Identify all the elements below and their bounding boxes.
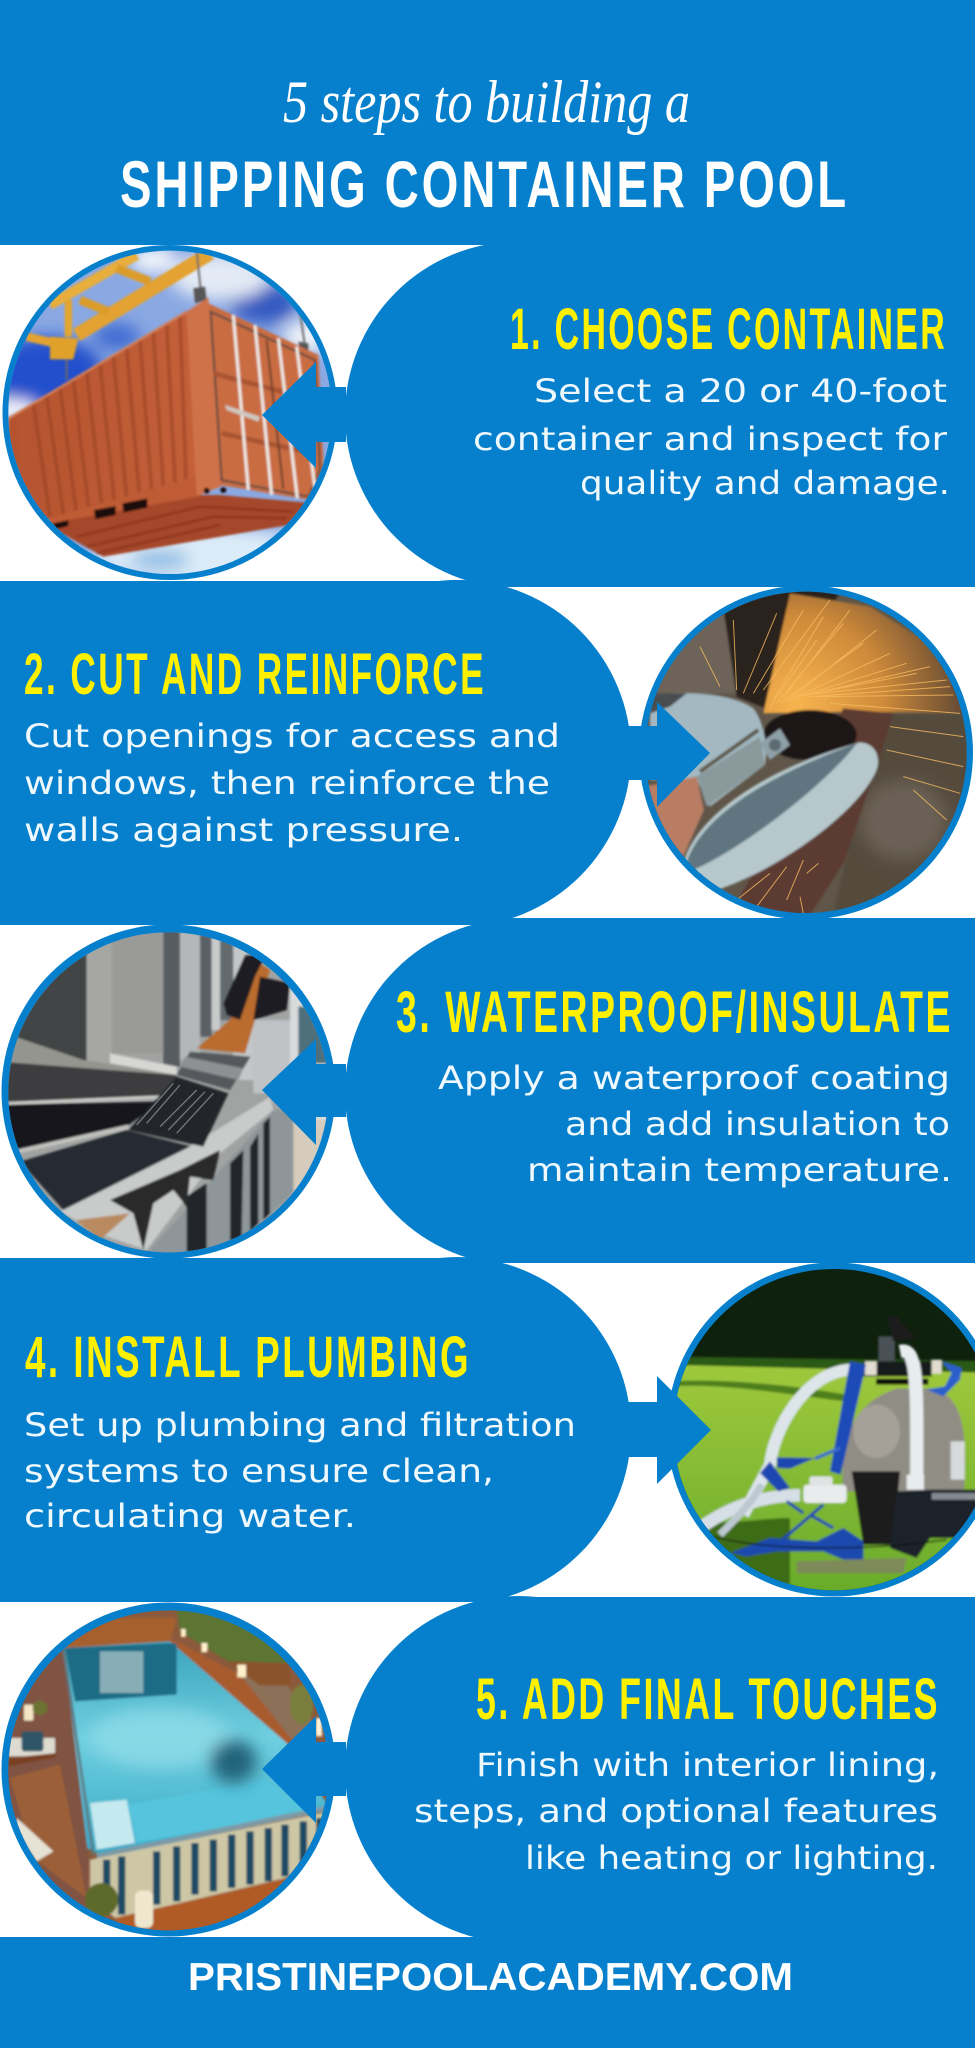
panel: step 3 background bbox=[0, 918, 692, 1266]
description: step 1: quality and damage. bbox=[580, 464, 950, 502]
title block bbox=[120, 69, 849, 221]
text block: step 3 bbox=[396, 980, 953, 1189]
arrow: step 5 bbox=[262, 1716, 346, 1823]
description: step 5: steps, and optional features bbox=[414, 1792, 938, 1830]
description: step 4 bbox=[24, 1406, 576, 1535]
heading: step 4: 4. INSTALL PLUMBING bbox=[25, 1325, 471, 1390]
description: step 2: Cut openings for access and bbox=[24, 717, 560, 755]
panel: step 2 background bbox=[284, 580, 975, 927]
description: step 2 bbox=[24, 717, 560, 849]
description: step 4: Set up plumbing and filtration bbox=[24, 1406, 576, 1444]
description: step 1: container and inspect for bbox=[473, 420, 948, 458]
photo: finished container pool at dusk bbox=[0, 1598, 345, 1943]
heading: step 2: 2. CUT AND REINFORCE bbox=[24, 642, 486, 707]
text block: step 2 bbox=[24, 642, 560, 849]
arrow: step 3 bbox=[262, 1039, 346, 1145]
description: step 3 bbox=[438, 1059, 952, 1189]
description: step 2: windows, then reinforce the bbox=[24, 764, 550, 802]
description: step 5: like heating or lighting. bbox=[525, 1839, 938, 1877]
text block: step 4 bbox=[24, 1325, 576, 1535]
panel: step 5 background bbox=[0, 1596, 692, 1943]
photo: brush applying waterproof coating bbox=[0, 920, 345, 1265]
description: step 5 bbox=[414, 1746, 939, 1877]
photo: sand filter and pool pump on a lawn bbox=[672, 1263, 975, 1596]
text block: step 5 bbox=[414, 1667, 940, 1877]
arrow: step 4 bbox=[628, 1376, 711, 1484]
description: step 5: Finish with interior lining, bbox=[476, 1746, 939, 1784]
description: step 4: systems to ensure clean, bbox=[24, 1452, 494, 1490]
text block: step 1 bbox=[473, 297, 950, 502]
footer website: PRISTINEPOOLACADEMY.COM bbox=[188, 1956, 793, 1999]
subtitle: 5 steps to building a bbox=[283, 69, 690, 135]
arrow: step 2 bbox=[628, 702, 710, 807]
description: step 3: and add insulation to bbox=[565, 1105, 950, 1143]
description: step 2: walls against pressure. bbox=[24, 811, 463, 849]
description: step 1 bbox=[473, 372, 950, 502]
photo: shipping container hanging from crane bbox=[0, 240, 350, 590]
panel: step 4 background bbox=[284, 1257, 975, 1604]
description: step 1: Select a 20 or 40-foot bbox=[534, 372, 947, 410]
arrow: step 1 bbox=[262, 362, 346, 468]
panel: step 1 background bbox=[0, 242, 692, 588]
description: step 3: maintain temperature. bbox=[527, 1151, 952, 1189]
description: step 3: Apply a waterproof coating bbox=[438, 1059, 950, 1097]
description: step 4: circulating water. bbox=[24, 1497, 356, 1535]
photo: angle grinder cutting steel with sparks bbox=[630, 580, 975, 925]
